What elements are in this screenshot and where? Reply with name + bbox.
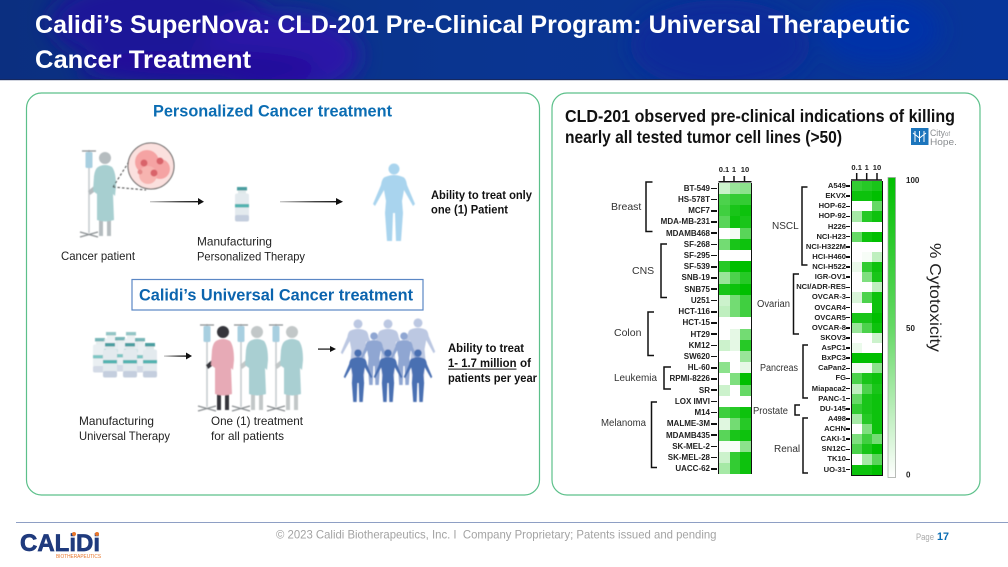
callout: ability to treat one patient: one (1) Patient: [431, 202, 508, 216]
icon: single treated patient: [373, 164, 415, 241]
labels: left heatmap cell lines: SF-295: [684, 251, 710, 260]
labels: right heatmap cell lines: CaPan2: [818, 363, 846, 372]
brackets: left heatmap cancer types: [646, 182, 671, 468]
labels: left heatmap cell lines: HCT-116: [678, 307, 710, 316]
labels: right heatmap cell lines: HOP-92: [819, 211, 846, 220]
labels: left heatmap cell lines: SF-539: [684, 262, 710, 271]
label: one treatment for all patients: [211, 414, 304, 443]
panel: CLD-201 tumor cell line results: [552, 93, 980, 495]
label: manufacturing universal therapy: Universal Therapy: [79, 429, 170, 443]
header banner: [0, 0, 1008, 80]
footer rule: [16, 522, 1008, 523]
callout: ability to treat one patient: [431, 188, 532, 216]
labels: right heatmap cell lines: CAKI-1: [821, 434, 846, 443]
brackets: right heatmap cancer types: [794, 187, 808, 473]
page number: 17: [937, 531, 949, 543]
labels: left heatmap cell lines: HT29: [690, 330, 710, 339]
labels: right heatmap cell lines: AsPC1: [822, 343, 846, 352]
icon: personalized therapy vial: [235, 187, 249, 222]
icon: three patients with IV: [198, 324, 303, 411]
labels: right heatmap cell lines: EKVX: [825, 191, 846, 200]
icon: cancer patient with IV and cell inset: [80, 143, 174, 237]
labels: left heatmap cell lines: SNB-19: [682, 273, 710, 282]
group labels: left heatmap cancer types: [601, 201, 657, 429]
arrow: patients to population: [318, 346, 336, 352]
labels: left heatmap cell lines: RPMI-8226: [670, 374, 710, 383]
title: Cancer Treatment: [35, 46, 252, 74]
axis: left heatmap concentrations: 1: [732, 165, 737, 174]
labels: left heatmap cell lines: SW620: [684, 352, 710, 361]
labels: left heatmap cell lines: SK-MEL-2: [672, 442, 710, 451]
label: manufacturing personalized therapy: [197, 234, 305, 264]
axis: right heatmap concentrations: 0.1: [851, 163, 863, 172]
label: manufacturing universal therapy: [79, 414, 170, 443]
heading: CLD-201 observations: CLD-201 observed pre-clinical indications of killing: [565, 106, 955, 126]
label: cancer patient: Cancer patient: [61, 249, 136, 263]
heading: CLD-201 observations: nearly all tested tumor cell lines (>50): [565, 127, 842, 147]
labels: left heatmap cell lines: U251: [691, 296, 710, 305]
heading: CLD-201 observations: [565, 106, 955, 147]
logo: City of Hope: City: [930, 128, 945, 139]
heatmap: left cell line panel: [718, 183, 752, 474]
callout: ability to treat 1-1.7 million patients: Ability to treat: [448, 341, 524, 355]
axis: left heatmap concentrations: 0.1: [719, 165, 730, 174]
callout: ability to treat 1-1.7 million patients: 1- 1.7 million: [448, 356, 516, 370]
group labels: left heatmap cancer types: Leukemia: [614, 372, 657, 384]
labels: left heatmap cell lines: M14: [694, 408, 710, 417]
panel: personalized and universal treatment: [26, 93, 540, 495]
labels: right heatmap cell lines: FG: [835, 373, 846, 382]
labels: left heatmap cell lines: MDA-MB-231: [661, 217, 710, 226]
labels: left heatmap cell lines: [661, 184, 717, 473]
labels: right heatmap cell lines: H226: [828, 222, 846, 230]
label: one treatment for all patients: One (1) treatment: [211, 414, 304, 428]
heatmap: right cell line panel: [851, 181, 883, 476]
axis: left heatmap concentrations: [718, 165, 752, 182]
labels: right heatmap cell lines: NCI/ADR-RES: [796, 282, 846, 291]
label: one treatment for all patients: for all patients: [211, 429, 284, 443]
group labels: right heatmap cancer types: [753, 221, 800, 455]
group labels: right heatmap cancer types: Prostate: [753, 406, 788, 417]
icon: universal therapy vials: [93, 332, 157, 378]
group labels: right heatmap cancer types: Pancreas: [760, 363, 798, 374]
labels: left heatmap cell lines: MCF7: [688, 206, 710, 215]
group labels: left heatmap cancer types: Melanoma: [601, 417, 646, 429]
labels: right heatmap cell lines: A549: [828, 181, 846, 190]
color scale: 0: [906, 470, 911, 480]
axis: right heatmap concentrations: 1: [865, 163, 870, 172]
callout: ability to treat 1-1.7 million patients: [448, 341, 537, 385]
label: manufacturing personalized therapy: Personalized Therapy: [197, 250, 305, 264]
title: [35, 11, 910, 74]
labels: right heatmap cell lines: HOP-62: [819, 201, 846, 210]
icon: patient population: [341, 318, 435, 402]
labels: left heatmap cell lines: MDAMB468: [666, 229, 710, 238]
labels: right heatmap cell lines: NCI-H522: [812, 262, 846, 271]
title: Calidi’s SuperNova: CLD-201 Pre-Clinical Program: Universal Therapeutic: [35, 11, 910, 39]
labels: right heatmap cell lines: NCI-H322M: [806, 242, 846, 251]
labels: right heatmap cell lines: TK10: [827, 454, 846, 463]
footer copyright: © 2023 Calidi Biotherapeutics, Inc. I Company Proprietary; Patents issued and pending: [276, 527, 716, 541]
logo: City of Hope: Hope.: [930, 137, 957, 148]
logo: City of Hope: of: [945, 132, 950, 138]
labels: right heatmap cell lines: PANC-1: [818, 394, 846, 403]
logo: Calidi Biotherapeutics: BIOTHERAPEUTICS: [56, 554, 102, 560]
page number: [916, 531, 949, 543]
labels: left heatmap cell lines: LOX IMVI: [675, 397, 710, 406]
color scale: 100: [906, 176, 920, 185]
labels: right heatmap cell lines: SN12C: [822, 444, 846, 453]
labels: left heatmap cell lines: MDAMB435: [666, 430, 710, 440]
callout: ability to treat 1-1.7 million patients: patients per year: [448, 371, 537, 385]
group labels: left heatmap cancer types: CNS: [632, 265, 654, 277]
axis: right heatmap concentrations: [851, 163, 882, 180]
labels: left heatmap cell lines: MALME-3M: [667, 419, 710, 428]
color scale: 50: [906, 324, 915, 333]
logo: Calidi Biotherapeutics: CALiDi: [20, 530, 100, 557]
page number: Page: [916, 532, 934, 543]
labels: right heatmap cell lines: OVCAR-3: [812, 292, 846, 301]
callout: ability to treat one patient: Ability to treat only: [431, 188, 532, 202]
heading box: Calidi's universal cancer treatment: [132, 280, 423, 310]
labels: right heatmap cell lines: Miapaca2: [812, 384, 846, 392]
labels: right heatmap cell lines: DU-145: [820, 404, 846, 413]
labels: right heatmap cell lines: OVCAR-8: [812, 323, 846, 332]
labels: right heatmap cell lines: NCI-H23: [816, 232, 846, 241]
label: manufacturing universal therapy: Manufacturing: [79, 414, 154, 428]
labels: left heatmap cell lines: KM12: [689, 341, 710, 350]
labels: left heatmap cell lines: SNB75: [684, 285, 710, 294]
labels: left heatmap cell lines: HL-60: [688, 363, 710, 372]
group labels: right heatmap cancer types: Ovarian: [757, 299, 790, 310]
labels: right heatmap cell lines: BxPC3: [822, 353, 846, 362]
labels: right heatmap cell lines: [796, 181, 850, 474]
labels: left heatmap cell lines: HCT-15: [682, 318, 710, 327]
labels: right heatmap cell lines: SKOV3: [820, 333, 846, 342]
axis: right heatmap concentrations: 10: [873, 163, 881, 172]
labels: left heatmap cell lines: UACC-62: [675, 464, 710, 473]
arrow: therapy to patient: [280, 198, 343, 205]
callout: ability to treat 1-1.7 million patients: of: [520, 356, 532, 370]
logo: City of Hope: [911, 128, 957, 148]
label: manufacturing personalized therapy: Manufacturing: [197, 234, 272, 248]
group labels: left heatmap cancer types: Colon: [614, 327, 642, 339]
labels: right heatmap cell lines: A498: [828, 414, 846, 423]
labels: left heatmap cell lines: SF-268: [684, 240, 710, 249]
group labels: left heatmap cancer types: Breast: [611, 201, 641, 213]
group labels: right heatmap cancer types: Renal: [774, 444, 800, 455]
scale title: percent cytotoxicity: % Cytotoxicity: [926, 243, 943, 352]
labels: right heatmap cell lines: OVCAR4: [814, 302, 846, 312]
labels: right heatmap cell lines: HCI-H460: [812, 252, 846, 261]
color scale: [888, 176, 920, 480]
labels: right heatmap cell lines: UO-31: [824, 464, 846, 474]
labels: left heatmap cell lines: SK-MEL-28: [668, 453, 710, 462]
heading: personalized cancer treatment: Personalized Cancer treatment: [153, 102, 392, 120]
labels: right heatmap cell lines: ACHN: [824, 424, 846, 433]
arrow: vials to patients: [164, 352, 192, 360]
heading box: Calidi's universal cancer treatment: Calidi’s Universal Cancer treatment: [139, 286, 413, 304]
labels: right heatmap cell lines: OVCAR5: [814, 313, 846, 322]
labels: left heatmap cell lines: HS-578T: [678, 195, 710, 204]
group labels: right heatmap cancer types: NSCL: [772, 221, 799, 232]
labels: left heatmap cell lines: BT-549: [684, 184, 710, 193]
axis: left heatmap concentrations: 10: [741, 165, 749, 174]
labels: left heatmap cell lines: SR: [699, 386, 710, 395]
labels: right heatmap cell lines: IGR-OV1: [815, 272, 846, 281]
arrow: patient to manufacturing: [150, 198, 204, 205]
